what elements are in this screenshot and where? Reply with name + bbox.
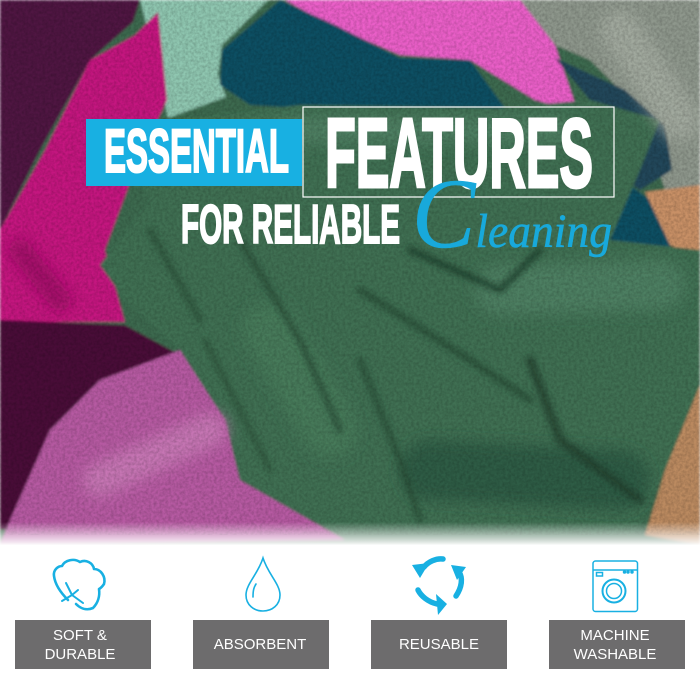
label: reusable xyxy=(371,620,507,669)
icon: cotton boll xyxy=(54,560,104,609)
label: soft and durable: SOFT & xyxy=(53,627,107,644)
label: soft and durable xyxy=(15,620,151,669)
label: reusable: REUSABLE xyxy=(399,636,479,653)
title: FOR RELIABLE: FOR RELIABLE xyxy=(181,193,400,255)
label: machine washable: MACHINE xyxy=(580,627,650,644)
icon: water drop xyxy=(246,558,280,611)
label: machine washable xyxy=(549,620,685,669)
label: absorbent xyxy=(193,620,329,669)
cloth fold shading xyxy=(20,30,680,480)
icon: recycle arrows xyxy=(412,559,466,615)
icon: washing machine xyxy=(593,561,638,612)
title: ESSENTIAL: ESSENTIAL xyxy=(104,117,289,185)
label: machine washable: WASHABLE xyxy=(574,646,656,662)
fabric texture xyxy=(0,0,700,535)
photo fade into white footer xyxy=(0,522,700,546)
title: blue banner xyxy=(86,119,302,186)
label: absorbent: ABSORBENT xyxy=(214,636,306,653)
title: script Cleaning: Cleaning xyxy=(412,158,612,269)
title: white frame xyxy=(303,107,614,197)
title block xyxy=(86,98,614,269)
label: soft and durable: DURABLE xyxy=(45,646,115,662)
